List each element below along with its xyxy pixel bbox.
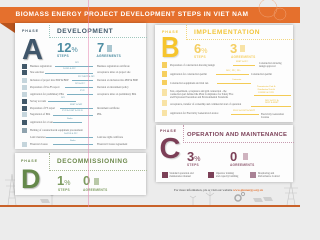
step 3	[22, 76, 138, 83]
agreements icon	[94, 178, 99, 185]
agreements label: AGREEMENTS	[231, 54, 256, 58]
item: standard operation	[162, 172, 194, 178]
step 8: PPA	[97, 113, 102, 116]
agreements stat: 0	[83, 173, 90, 188]
phase label: PHASE	[21, 158, 38, 162]
step 9: Application for a loan	[30, 120, 53, 124]
steps list: MOIT & MPI	[70, 104, 82, 106]
step 1: Preparation of construction drawing design	[170, 64, 215, 66]
agreements icon	[243, 153, 248, 160]
step 4: Distribution Unit &	[258, 89, 275, 91]
step 4	[22, 82, 129, 90]
letter A: A	[22, 34, 43, 66]
step 1: Business registration	[30, 64, 52, 68]
panel: operation and maintenance	[156, 125, 293, 182]
step 12: Financial closure	[30, 142, 48, 146]
steps list: Banks	[67, 118, 72, 120]
steps label: STEPS	[58, 188, 70, 192]
step 11: Land use right certificate	[97, 136, 123, 138]
step 7: Preparation of FS report	[30, 106, 55, 110]
item: standard operation: maintenance manual	[170, 175, 191, 178]
step 5	[162, 100, 291, 107]
step 5: Acceptance letter on preliminary PPA	[97, 92, 136, 96]
agreements stat: 3	[230, 40, 237, 56]
step 4: DONRE & PCFD	[258, 92, 274, 94]
step 6: Electricity Generation	[261, 113, 284, 116]
agreements label: AGREEMENTS	[83, 188, 108, 192]
agreements label: AGREEMENTS	[96, 54, 121, 58]
panel: decommissioning	[15, 153, 146, 195]
step 2: Application for construction permit	[170, 72, 207, 76]
steps label: STEPS	[187, 162, 199, 166]
step 10: Holding of construction & equipment procurement	[30, 128, 83, 132]
step 5: Application for preliminary PPA	[30, 92, 64, 96]
letter B: B	[160, 32, 179, 64]
step 1	[162, 60, 282, 68]
step 4: connection part defined the Plant Compliance for Safety Fire	[170, 93, 233, 96]
step 2: DOC, PPC, PPA	[226, 70, 241, 72]
step 5: DOIT & MOIT	[265, 102, 279, 104]
phase label: PHASE	[162, 30, 179, 34]
step 1: Construction drawing	[259, 62, 282, 64]
steps list: EVN	[80, 90, 84, 92]
step 6: ERAV & DOIT & MOIT	[233, 110, 255, 112]
item: monitoring: Monitoring and	[258, 172, 274, 174]
step 11	[30, 132, 123, 138]
phase label: PHASE	[160, 129, 177, 133]
steps label: STEPS	[57, 54, 69, 58]
step 12: Financial Closure Agreement	[97, 142, 127, 146]
steps list	[22, 62, 138, 147]
bottom strip	[0, 205, 300, 207]
step 6	[162, 110, 284, 119]
step 4	[162, 86, 291, 99]
step 5	[22, 90, 136, 97]
step 6: License	[261, 116, 269, 119]
step 12	[22, 140, 128, 147]
step 4: and Explosion Prevention and Environmental Standards	[170, 96, 228, 99]
agreements stat: 0	[230, 148, 237, 164]
heading frame	[49, 24, 147, 38]
item: monitoring	[250, 172, 280, 178]
heading frame	[186, 25, 294, 40]
letter C: C	[160, 133, 180, 165]
step 9	[22, 118, 82, 125]
steps list: DPI	[75, 62, 79, 64]
step 3: Contractor	[232, 79, 241, 81]
steps stat: 12%	[57, 40, 78, 54]
agreements label: AGREEMENTS	[230, 162, 254, 166]
item: standard operation: Standard operation and	[170, 172, 194, 174]
step 2: Site selection	[30, 71, 44, 74]
steps list: DPI	[61, 96, 65, 98]
step 1: MOIT & PPC	[236, 61, 248, 63]
step 7	[22, 104, 120, 111]
steps stat: 3%	[187, 148, 200, 164]
steps label: STEPS	[194, 54, 206, 58]
agreements stat: 7	[97, 40, 104, 54]
item: monitoring: Performance Control	[258, 175, 280, 178]
step 3: Inclusion of project into PDP & BDP	[30, 78, 69, 82]
step 2: Construction permit	[251, 72, 272, 76]
step 6: Survey account	[30, 100, 46, 102]
step 6: Application for Electricity Generation Licence	[170, 112, 218, 115]
step 1	[22, 62, 130, 69]
heading: OPERATION AND MAINTENANCE	[187, 132, 287, 138]
step 7: Investment certificate	[97, 106, 120, 110]
step 4: Decision on investment policy	[97, 86, 129, 88]
step 8: Negotiation of PPA	[30, 113, 50, 116]
step 3: Construction equipment and trial run	[170, 82, 208, 84]
footer text: For more information, pls or visit our website www.gizenergy.org.vn	[174, 188, 263, 192]
letter D: D	[21, 164, 40, 194]
step 3: Decision on inclusion into PDP & BDP	[97, 78, 138, 82]
steps list: DoNRE & PPC	[64, 132, 78, 134]
step 11: Land clearance	[30, 136, 46, 138]
step 6	[22, 96, 76, 104]
steps list: Banks	[70, 140, 75, 142]
step 4: Test, experiment, acceptance and grid connection - the	[170, 90, 226, 92]
step 1: design approval	[259, 65, 276, 68]
heading frame	[49, 153, 147, 171]
steps stat: 6%	[194, 40, 207, 56]
item: operator training: and capacity building	[216, 175, 238, 178]
heading frame	[182, 125, 294, 142]
panel: implementation: Transmission Unit &	[257, 86, 275, 88]
heading: DECOMMISSIONING	[57, 158, 128, 165]
step 10	[22, 128, 83, 133]
step 5: DOC & PPC &	[265, 100, 279, 102]
steps list: EVN & DOIT & ERAV	[62, 110, 83, 112]
step 2: Acceptance letter on project site	[97, 71, 130, 74]
step 8	[22, 110, 102, 117]
step 4: Preparation of Pre-FS report	[30, 86, 59, 88]
agreements icon	[107, 44, 112, 52]
step 3	[162, 78, 251, 85]
heading: IMPLEMENTATION	[194, 28, 260, 36]
guide line	[87, 0, 89, 207]
steps list: DARD & PPC	[63, 68, 76, 70]
step 5: Acceptance, transfer of ownership and commercial start of operation	[170, 102, 241, 106]
step 2	[162, 70, 272, 77]
steps list: PPC/MOIT & DPI	[78, 76, 94, 78]
steps stat: 1%	[57, 173, 70, 188]
title: BIOMASS ENERGY PROJECT DEVELOPMENT STEPS IN VIET NAM	[16, 11, 248, 18]
steps list: DPI & PPC	[75, 82, 85, 84]
step 2	[22, 68, 130, 75]
panel: development	[15, 22, 146, 148]
banner fold	[0, 22, 15, 32]
step 1: Business registration certificate	[97, 64, 130, 68]
banner swirl	[258, 0, 286, 20]
panel: implementation	[155, 25, 293, 122]
heading: DEVELOPMENT	[57, 28, 113, 35]
phase label: PHASE	[22, 29, 39, 33]
agreements icon	[240, 45, 245, 52]
item: operator training	[208, 172, 238, 178]
banner	[0, 7, 300, 22]
item: operator training: Operator training	[216, 172, 234, 174]
